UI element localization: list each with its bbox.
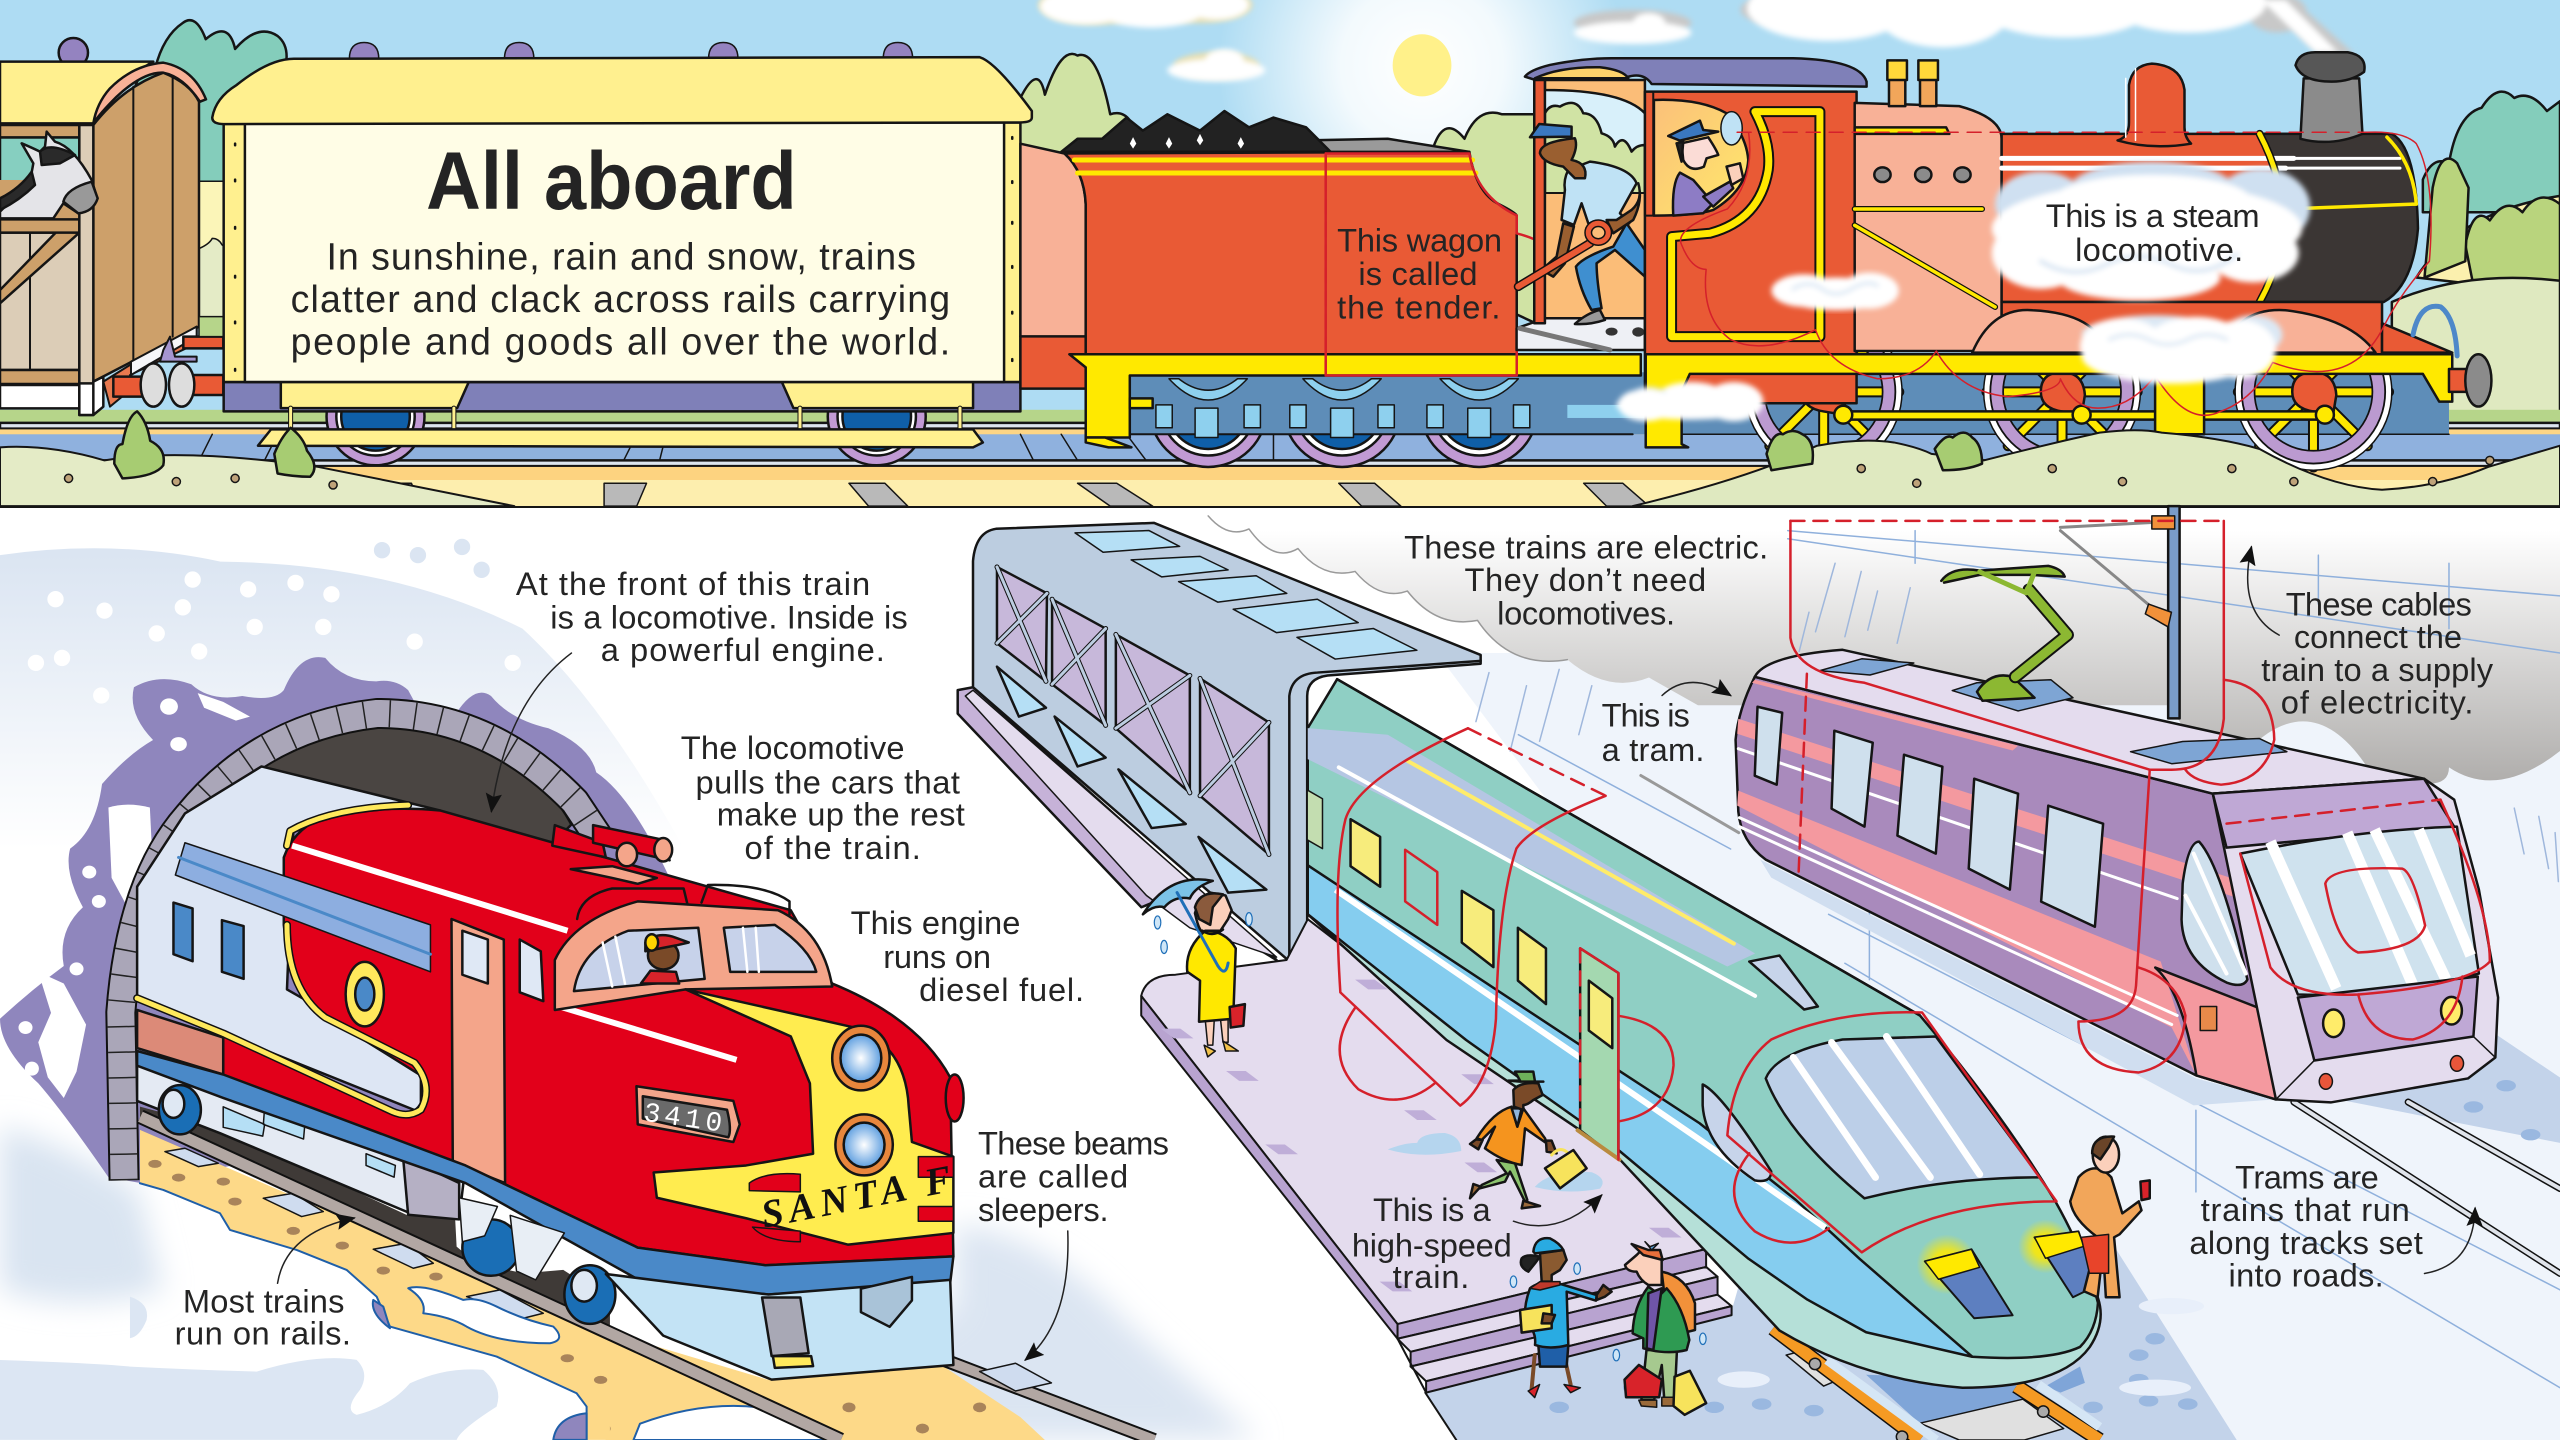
text: diesel fuel: diesel fuel. (919, 971, 1084, 1008)
text: locomotive pulls the cars: pulls the cars that (696, 763, 960, 800)
text: electric trains: locomotives. (1497, 594, 1675, 631)
cab side (1645, 92, 1857, 403)
text: trams: trains that run (2201, 1191, 2410, 1228)
tender wheels (1123, 349, 1646, 467)
text: locomotive at the front (516, 565, 908, 668)
steam engine flap outline (1681, 132, 2431, 415)
lower frame and splashers (2002, 302, 2382, 356)
rain (1476, 563, 2558, 882)
intro text (291, 235, 950, 362)
arrow: to sleepers (1025, 1231, 1068, 1360)
text: locomotive pulls the cars (681, 729, 965, 866)
track ballast and rail (0, 1107, 1154, 1440)
cloud (1616, 382, 1763, 421)
text: most trains (175, 1283, 351, 1351)
overhead cables (1518, 531, 2560, 1388)
tram shadow (1760, 860, 2276, 1105)
title: All aboard (426, 136, 797, 227)
ballast beyond the train front (586, 1332, 1045, 1440)
text: tender (1337, 221, 1502, 325)
red main body (223, 809, 953, 1265)
arrow: to tram (1662, 682, 1731, 696)
high-speed train (1307, 679, 2101, 1388)
text: diesel fuel: This engine (851, 904, 1020, 941)
text: electric trains: They don’t need (1464, 561, 1706, 598)
text: cables: of electricity. (2281, 683, 2473, 720)
horse wagon (0, 38, 206, 415)
text: sleepers: sleepers. (978, 1191, 1109, 1228)
track under high-speed train (1773, 1328, 2100, 1440)
intro text: people and goods all over the world. (291, 320, 950, 362)
arrow: to cables (2248, 547, 2279, 635)
tram roof (1755, 650, 2424, 794)
tram (1736, 521, 2498, 1105)
blue skirt band (137, 1051, 953, 1295)
engineer (641, 934, 689, 984)
train windows (1307, 790, 1619, 1160)
canopy windows (997, 567, 1269, 854)
raindrops (1154, 913, 1706, 1361)
headlights (832, 1026, 893, 1175)
text: locomotive at the front: is a locomotive. Inside is (550, 599, 908, 636)
locomotive wheels (1749, 317, 2389, 467)
bushes (114, 411, 1982, 478)
panel: yellow wagon with title (212, 42, 1032, 465)
tram front (2213, 779, 2498, 1102)
background bushes (131, 20, 2560, 424)
callout cloud: steam locomotive (1992, 162, 2310, 300)
text: locomotive at the front: a powerful engine. (601, 631, 885, 668)
panel: electric trains (958, 506, 2560, 1440)
text: cables: These cables (2286, 586, 2472, 623)
wheels and bogie (159, 1085, 615, 1324)
light blue front skirt (606, 1274, 953, 1380)
chimney (2300, 78, 2362, 142)
boiler (1855, 52, 2452, 356)
tunnel interior (261, 720, 571, 849)
pantograph (1941, 566, 2073, 711)
platform canopy (958, 523, 1481, 961)
text: diesel fuel (851, 904, 1084, 1008)
text: diesel fuel: runs on (883, 938, 991, 975)
text: tender: the tender. (1337, 288, 1500, 325)
pavement by the high-speed train (1425, 1033, 2560, 1440)
text: trams (2189, 1159, 2423, 1294)
road rails (1641, 776, 2560, 1273)
text: sleepers: These beams (978, 1124, 1169, 1161)
intro text: In sunshine, rain and snow, trains (327, 235, 916, 277)
text: high-speed train (1352, 1191, 1512, 1295)
text: locomotive pulls the cars: of the train. (744, 829, 921, 866)
text: trams: along tracks set (2189, 1224, 2423, 1261)
text: number 3410: 3410 (642, 1099, 728, 1141)
person: conductor (1520, 1238, 1612, 1398)
callout cloud: steam locomotive: locomotive. (2075, 231, 2243, 268)
tender body (1064, 152, 1517, 354)
windshield (1766, 1036, 2040, 1198)
platform puddles (1388, 1133, 1603, 1191)
text: cables: train to a supply (2261, 651, 2494, 688)
buffer and rear lamp (2413, 306, 2491, 407)
text: tram label (1602, 697, 1704, 768)
storm cloud (1208, 516, 2560, 784)
text: tender: is called (1358, 255, 1478, 292)
text: trams: Trams are (2235, 1159, 2379, 1196)
locomotive: steam engine (0, 52, 2560, 507)
tram side (1736, 677, 2276, 1099)
tender springs (1156, 379, 1530, 438)
tender coal (1061, 111, 1469, 152)
lamps (1917, 1219, 2073, 1294)
yellow nose (654, 989, 953, 1245)
blue lower band (1308, 865, 1972, 1357)
text: sleepers (978, 1124, 1169, 1228)
person: man with phone (2070, 1137, 2150, 1297)
arrow: to high-speed train (1513, 1195, 1602, 1226)
text: locomotive pulls the cars: make up the rest (717, 795, 965, 832)
wagon underframe and wheels (224, 367, 1020, 465)
person: running man (1470, 1072, 1587, 1208)
text: SANTA F: SANTA F (758, 1158, 955, 1237)
yellow S panel (137, 805, 426, 1115)
tram windows (1755, 707, 2247, 985)
text: high-speed train: train. (1393, 1258, 1469, 1295)
driver (1668, 112, 1743, 216)
tunnel arch stones (121, 713, 598, 1180)
coach section silver (137, 766, 440, 1113)
platform markings (1161, 980, 1682, 1291)
running board (1646, 354, 2452, 447)
text: most trains: run on rails. (175, 1314, 351, 1351)
train teal body (1308, 679, 2098, 1358)
intro text: clatter and clack across rails carrying (291, 278, 950, 320)
cloud (2080, 315, 2282, 384)
fireman (1518, 124, 1645, 324)
cloud (1771, 273, 1899, 310)
electric pole and arm (2060, 506, 2180, 718)
text: tram label: a tram. (1602, 731, 1704, 768)
text: high-speed train: This is a (1373, 1191, 1491, 1228)
text: cables: connect the (2294, 618, 2462, 655)
coach windows (173, 903, 244, 979)
train flap outline (1337, 728, 1674, 1160)
text: electric trains (1404, 528, 1768, 631)
person: hiker with bags (1625, 1242, 1706, 1415)
emblem (346, 962, 384, 1026)
number plate (636, 1086, 740, 1142)
door (452, 919, 505, 1183)
horns (552, 825, 672, 884)
snow patches on rock (18, 693, 250, 1098)
salmon panel (137, 1010, 223, 1075)
road background (1437, 653, 2560, 1440)
text: most trains: Most trains (183, 1283, 344, 1320)
tender flap outline (1326, 153, 1569, 376)
text: cables (2261, 586, 2494, 720)
clouds in the sky (1038, 0, 2354, 82)
roof lights (349, 42, 913, 59)
text: trams: into roads. (2229, 1257, 2384, 1294)
callout cloud: steam locomotive: This is a steam (2046, 197, 2260, 234)
train nose details (1703, 956, 2098, 1318)
roof vents (1820, 659, 2287, 764)
wagon roof (212, 57, 1032, 124)
red boiler and dome (2002, 134, 2287, 302)
text: tram label: This is (1602, 697, 1690, 734)
text: locomotive at the front: At the front of this train (516, 565, 870, 602)
diesel locomotive (137, 766, 964, 1380)
railway track (0, 410, 2560, 506)
skylights (1075, 531, 1417, 659)
train door (1580, 948, 1618, 1160)
cab with fireman and driver (1517, 58, 1867, 403)
platform steps (1398, 1249, 1732, 1393)
arrow: to road tracks (2424, 1208, 2475, 1273)
couplings between wagons (103, 317, 223, 407)
text: sleepers: are called (978, 1158, 1128, 1195)
train lip (1308, 816, 2101, 1388)
foreground bank with bushes (0, 411, 2560, 506)
wagon: tender (1020, 111, 1646, 467)
text: locomotive pulls the cars: The locomotive (681, 729, 904, 766)
arrow: to locomotive (491, 653, 571, 811)
platform (1141, 919, 1732, 1393)
icon: sun (1208, 0, 1633, 278)
window stripe (175, 843, 430, 972)
text: electric trains: These trains are electric. (1404, 528, 1768, 565)
text: tender: This wagon (1337, 221, 1502, 258)
roof stripe (1308, 728, 1755, 967)
arrow: to rails (278, 1218, 354, 1283)
panel: diesel locomotive in snow (0, 539, 1257, 1440)
tunnel entrance with purple rock (0, 657, 670, 1183)
tram stripes (1737, 680, 2248, 1075)
snow background (0, 539, 1257, 1440)
tram flap outline (1790, 521, 2490, 1072)
text: high-speed train: high-speed (1352, 1226, 1512, 1263)
person: woman with umbrella (1143, 879, 1245, 1057)
wagon body (224, 122, 1020, 382)
cab roof frame (555, 901, 832, 1010)
icon: horse (0, 132, 98, 218)
